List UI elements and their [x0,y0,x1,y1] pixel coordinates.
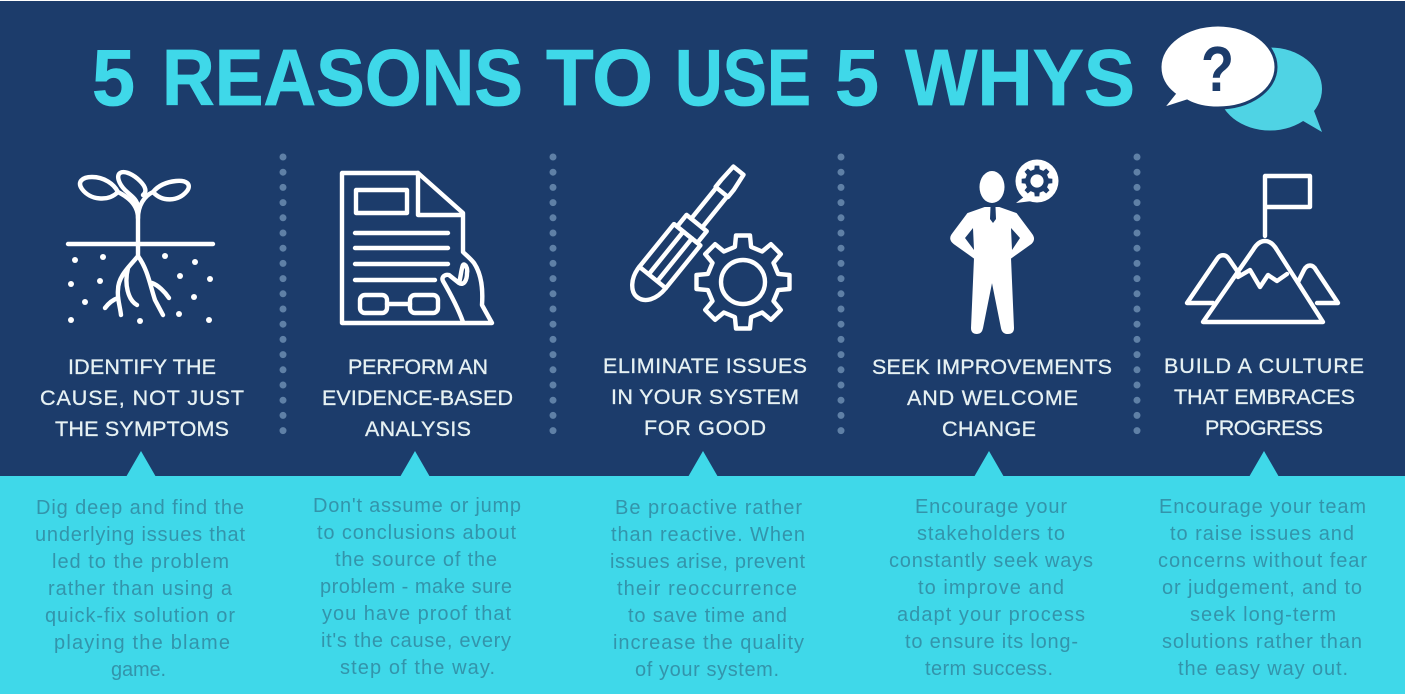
heading: seek improvements: AND WELCOME [907,386,1078,410]
heading: identify the cause: THE SYMPTOMS [55,417,229,441]
heading: eliminate issues [603,354,807,440]
body text: eliminate issues: issues arise, prevent [610,551,805,573]
body text: build a culture: the easy way out. [1178,658,1348,680]
body text: seek improvements: Encourage your [915,496,1067,518]
body text: eliminate issues: Be proactive rather [615,497,802,519]
panel: seek improvements [872,160,1112,680]
dotted dividers [283,157,1137,432]
panel: eliminate issues [603,160,807,681]
body text: build a culture: or judgement, and to [1162,577,1362,599]
body text: seek improvements: constantly seek ways [889,550,1093,572]
title: 5 [92,33,135,122]
body text: seek improvements: term success. [925,658,1053,680]
heading: identify the cause: IDENTIFY THE [68,355,216,379]
body text: build a culture: seek long-term [1190,604,1336,626]
body text: identify the cause: rather than using a [48,578,233,600]
heading: eliminate issues: IN YOUR SYSTEM [611,385,799,409]
heading: build a culture: THAT EMBRACES [1174,385,1355,409]
title: TO [546,33,653,122]
heading: build a culture: BUILD A CULTURE [1164,354,1364,378]
icon: document held in hand [342,173,492,323]
body text: eliminate issues: increase the quality [613,632,804,654]
heading: eliminate issues: ELIMINATE ISSUES [603,354,807,378]
icon: screwdriver and gear [624,160,790,328]
body text: identify the cause: underlying issues that [35,524,245,546]
heading: seek improvements [872,355,1112,441]
title: WHYS [905,33,1135,122]
body text: perform an analysis: to conclusions about [317,522,516,544]
body text: seek improvements: to improve and [918,577,1064,599]
body text: seek improvements: adapt your process [897,604,1085,626]
body text: perform an analysis [313,495,521,679]
heading: identify the cause: CAUSE, NOT JUST [40,386,244,410]
title [92,33,1135,122]
body text: identify the cause [35,497,245,681]
heading: seek improvements: SEEK IMPROVEMENTS [872,355,1112,379]
body text: seek improvements: to ensure its long- [905,631,1078,653]
body text: perform an analysis: step of the way. [340,657,495,679]
heading: perform an analysis: EVIDENCE-BASED [322,386,513,410]
heading: build a culture: PROGRESS [1205,416,1323,440]
body text: identify the cause: game. [111,659,166,681]
cyan lower band [0,451,1405,694]
title: 5 [835,33,879,122]
body text: eliminate issues: their reoccurrence [617,578,797,600]
body text: perform an analysis: it's the cause, every [321,630,511,652]
heading: eliminate issues: FOR GOOD [644,416,766,440]
body text: perform an analysis: problem - make sure [320,576,512,598]
body text: identify the cause: playing the blame [54,632,230,654]
body text: eliminate issues: to save time and [628,605,787,627]
heading: identify the cause [40,355,244,441]
body text: seek improvements: stakeholders to [917,523,1065,545]
body text: seek improvements [889,496,1093,680]
panel: perform an analysis [313,173,521,679]
title: USE [675,33,811,122]
body text: build a culture: concerns without fear [1158,550,1367,572]
panel: build a culture [1158,176,1367,680]
panel: identify the cause [35,172,245,681]
body text: perform an analysis: Don't assume or jump [313,495,521,517]
body text: eliminate issues [610,497,805,681]
icon: mountain with flag [1187,176,1338,322]
icon: speech bubbles with question mark: ? [1201,33,1234,105]
title: REASONS [162,33,523,122]
body text: identify the cause: Dig deep and find the [36,497,244,519]
heading: seek improvements: CHANGE [942,417,1036,441]
icon: person with gear thought [951,160,1058,333]
icon: seedling with roots [68,172,213,324]
body text: build a culture: Encourage your team [1159,496,1366,518]
body text: build a culture: to raise issues and [1170,523,1354,545]
body text: eliminate issues: of your system. [635,659,779,681]
body text: identify the cause: quick-fix solution or [45,605,235,627]
heading: build a culture [1164,354,1364,440]
body text: perform an analysis: you have proof that [322,603,511,625]
heading: perform an analysis: PERFORM AN [348,355,488,379]
heading: perform an analysis [322,355,513,441]
body text: build a culture [1158,496,1367,680]
body text: build a culture: solutions rather than [1162,631,1362,653]
icon: speech bubbles with question mark [1160,25,1322,132]
body text: perform an analysis: the source of the [335,549,497,571]
body text: eliminate issues: than reactive. When [611,524,805,546]
heading: perform an analysis: ANALYSIS [365,417,471,441]
body text: identify the cause: led to the problem [52,551,229,573]
